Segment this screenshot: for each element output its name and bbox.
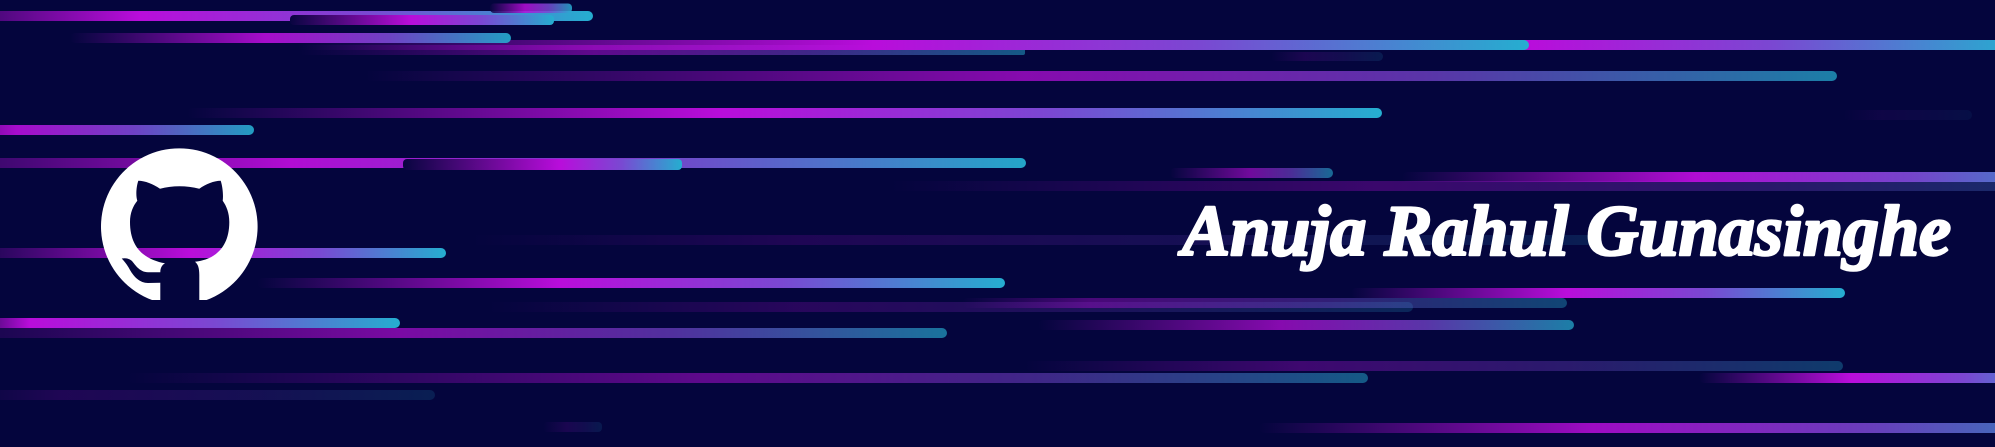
title: author name: Anuja Rahul Gunasinghe: [1178, 191, 1951, 271]
icon: GitHub octocat logo: [101, 148, 258, 300]
